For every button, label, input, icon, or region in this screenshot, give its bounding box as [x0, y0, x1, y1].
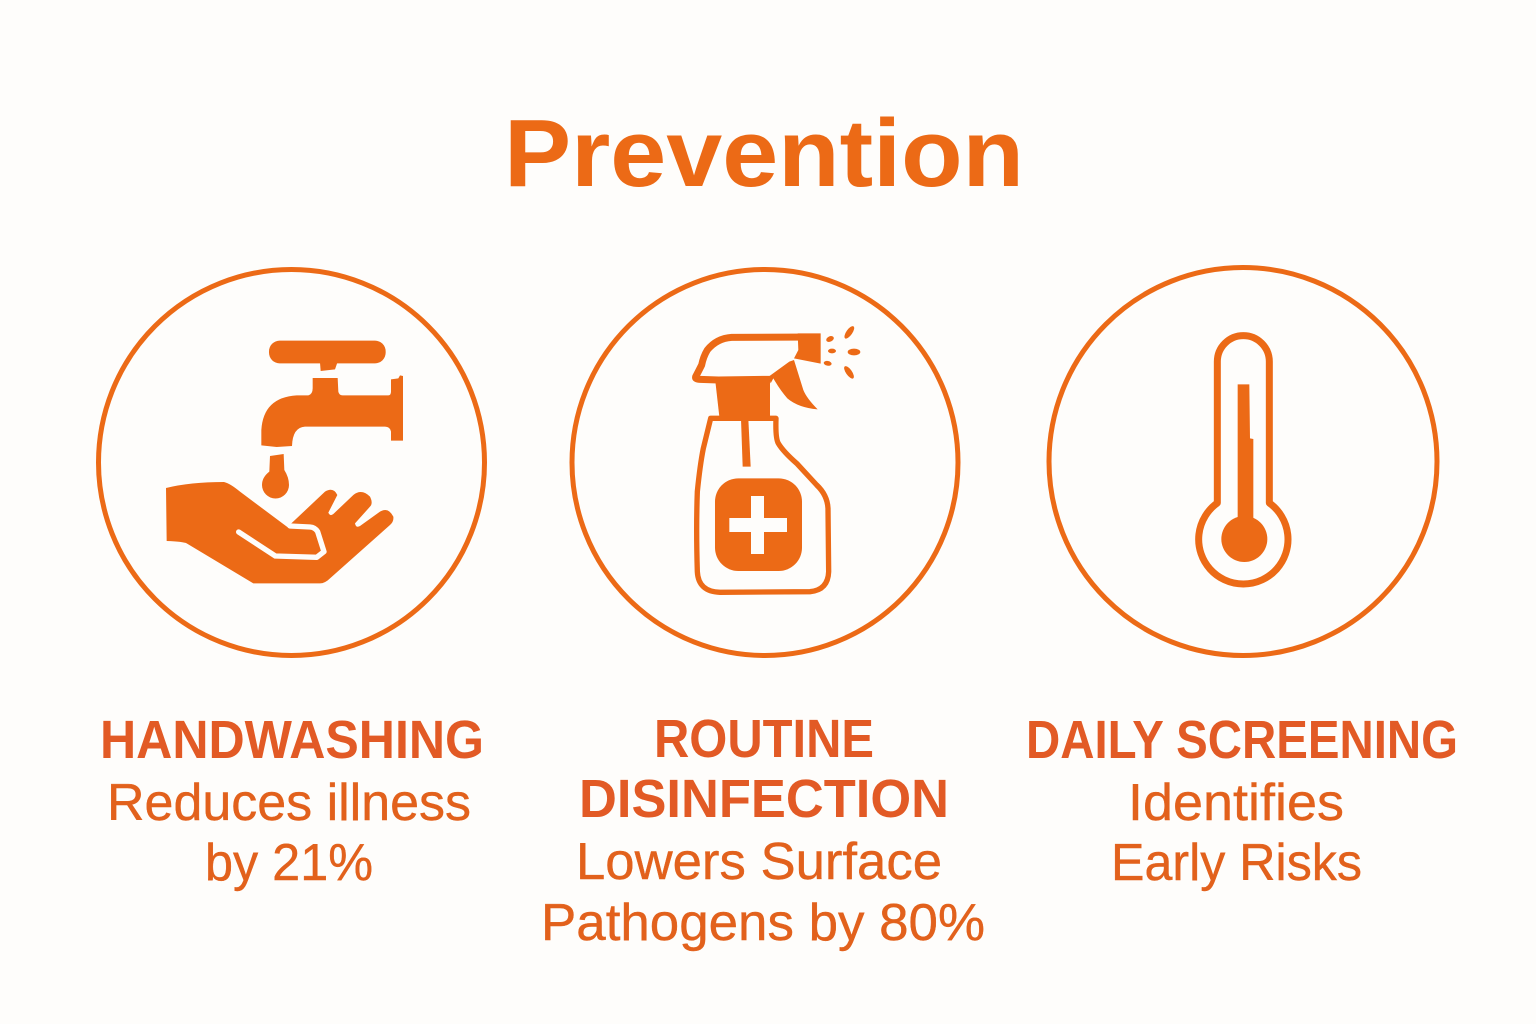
panel: daily screening [1026, 268, 1458, 892]
text: disinfection stat: Pathogens by 80% [541, 894, 985, 952]
text: screening detail: Early Risks [1111, 834, 1362, 892]
icon ring: disinfection [572, 270, 958, 656]
text: handwashing stat: Reduces illness [107, 774, 471, 832]
heading: routine disinfection: DISINFECTION [579, 769, 949, 829]
text: disinfection stat: Lowers Surface [576, 833, 942, 891]
heading: routine disinfection [579, 709, 949, 829]
heading: routine disinfection: ROUTINE [654, 709, 874, 769]
text: handwashing stat [107, 774, 471, 892]
icon ring: handwashing [98, 270, 484, 656]
panel: handwashing [98, 270, 484, 892]
text: disinfection stat [541, 833, 985, 952]
icon: faucet and hand [166, 341, 403, 583]
panel: routine disinfection [541, 270, 985, 952]
text: handwashing stat: by 21% [205, 834, 373, 892]
heading: handwashing: HANDWASHING [100, 710, 484, 770]
text: screening detail: Identifies [1128, 774, 1344, 832]
title: Prevention [504, 100, 1024, 207]
icon: thermometer [1199, 336, 1288, 584]
heading: daily screening: DAILY SCREENING [1026, 710, 1458, 770]
text: screening detail [1111, 774, 1362, 892]
icon ring: screening [1049, 268, 1437, 656]
icon: spray bottle [696, 325, 860, 592]
